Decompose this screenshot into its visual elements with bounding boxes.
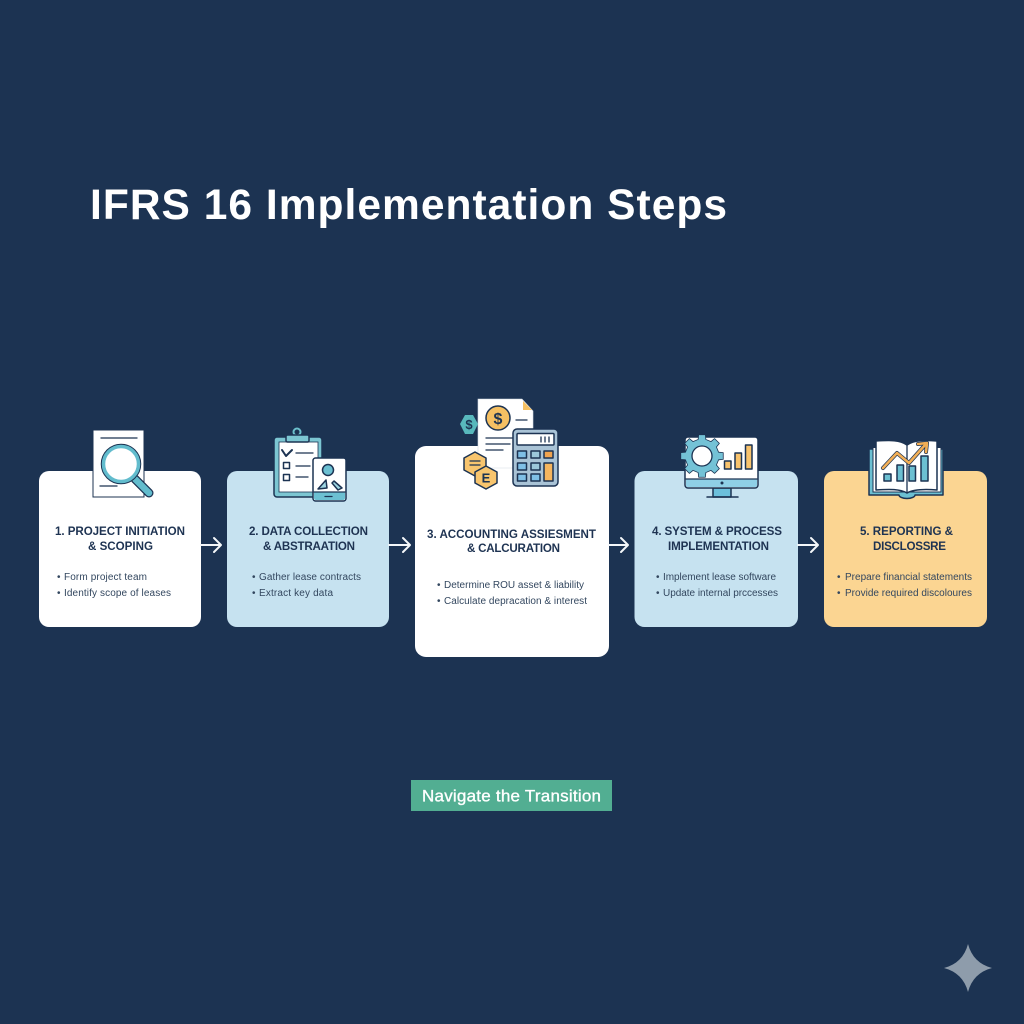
card 2 heading: & ABSTRAATION xyxy=(263,540,355,553)
card 3 bullets: Determine ROU asset & liability xyxy=(444,580,584,591)
callout: navigate the transition xyxy=(411,780,612,811)
card 4 bullets: • xyxy=(656,588,660,599)
card 1 heading: 1. PROJECT INITIATION xyxy=(55,525,185,538)
icon: invoice, coins and calculator: E xyxy=(482,470,491,486)
card 4 heading: 4. SYSTEM & PROCESS xyxy=(652,525,782,538)
arrow: step 3 to 4 xyxy=(609,538,628,552)
card 5 bullets xyxy=(837,572,972,599)
panel: step 3 accounting assessment xyxy=(415,399,609,657)
panel: step 4 system and process xyxy=(634,435,798,627)
callout: navigate the transition: Navigate the Transition xyxy=(422,786,601,806)
card 1 bullets xyxy=(57,572,171,599)
card 5 bullets: Provide required discoloures xyxy=(845,588,972,599)
title: IFRS 16 Implementation Steps xyxy=(90,182,727,229)
card 1 bullets: Form project team xyxy=(64,572,147,583)
card 5 heading: 5. REPORTING & xyxy=(860,525,954,538)
icon: document with magnifier xyxy=(93,430,149,497)
arrow: step 4 to 5 xyxy=(798,538,818,552)
card 1 heading xyxy=(55,525,185,553)
card 5 bullets: • xyxy=(837,572,841,583)
card 5 bullets: Prepare financial statements xyxy=(845,572,972,583)
card 3 heading: & CALCURATION xyxy=(467,542,560,555)
card 4 bullets xyxy=(656,572,778,599)
card 4 bullets: Implement lease software xyxy=(663,572,776,583)
card 2 bullets: Extract key data xyxy=(259,588,333,599)
icon: open book with growth chart xyxy=(869,440,943,498)
card 1 bullets: Identify scope of leases xyxy=(64,588,171,599)
icon: clipboard and tablet xyxy=(274,428,346,501)
card 3 background xyxy=(415,446,609,657)
card 3 bullets xyxy=(437,580,587,607)
card 1 bullets: • xyxy=(57,588,61,599)
card 2 background xyxy=(227,471,389,627)
card 3 heading: 3. ACCOUNTING ASSIESMENT xyxy=(427,528,596,541)
card 2 bullets xyxy=(252,572,361,599)
card 5 heading xyxy=(860,525,954,553)
card 5 background xyxy=(824,471,987,627)
card 1 heading: & SCOPING xyxy=(88,540,153,553)
card 2 bullets: Gather lease contracts xyxy=(259,572,361,583)
card 4 background xyxy=(634,471,798,627)
icon: invoice, coins and calculator xyxy=(460,399,558,489)
card 3 bullets: • xyxy=(437,596,441,607)
arrow: step 1 to 2 xyxy=(201,538,221,552)
card 4 heading xyxy=(652,525,782,553)
icon: monitor with gear and bars xyxy=(681,435,758,497)
panel: step 5 reporting and disclosure xyxy=(824,440,987,627)
card 2 bullets: • xyxy=(252,572,256,583)
card 4 heading: IMPLEMENTATION xyxy=(668,540,769,553)
card 1 bullets: • xyxy=(57,572,61,583)
panel: step 2 data collection xyxy=(227,428,389,627)
card 5 heading: DISCLOSSRE xyxy=(873,540,946,553)
card 2 heading xyxy=(249,525,368,553)
card 4 bullets: • xyxy=(656,572,660,583)
card 3 heading xyxy=(427,528,596,555)
arrow: step 2 to 3 xyxy=(389,538,410,552)
icon: invoice, coins and calculator: $ xyxy=(465,417,473,432)
card 2 bullets: • xyxy=(252,588,256,599)
icon: invoice, coins and calculator: $ xyxy=(494,411,503,428)
panel: step 1 project initiation xyxy=(39,430,201,627)
icon: sparkle watermark xyxy=(944,944,992,992)
card 1 background xyxy=(39,471,201,627)
card 2 heading: 2. DATA COLLECTION xyxy=(249,525,368,538)
card 3 bullets: • xyxy=(437,580,441,591)
card 5 bullets: • xyxy=(837,588,841,599)
card 4 bullets: Update internal prccesses xyxy=(663,588,778,599)
card 3 bullets: Calculate depracation & interest xyxy=(444,596,587,607)
